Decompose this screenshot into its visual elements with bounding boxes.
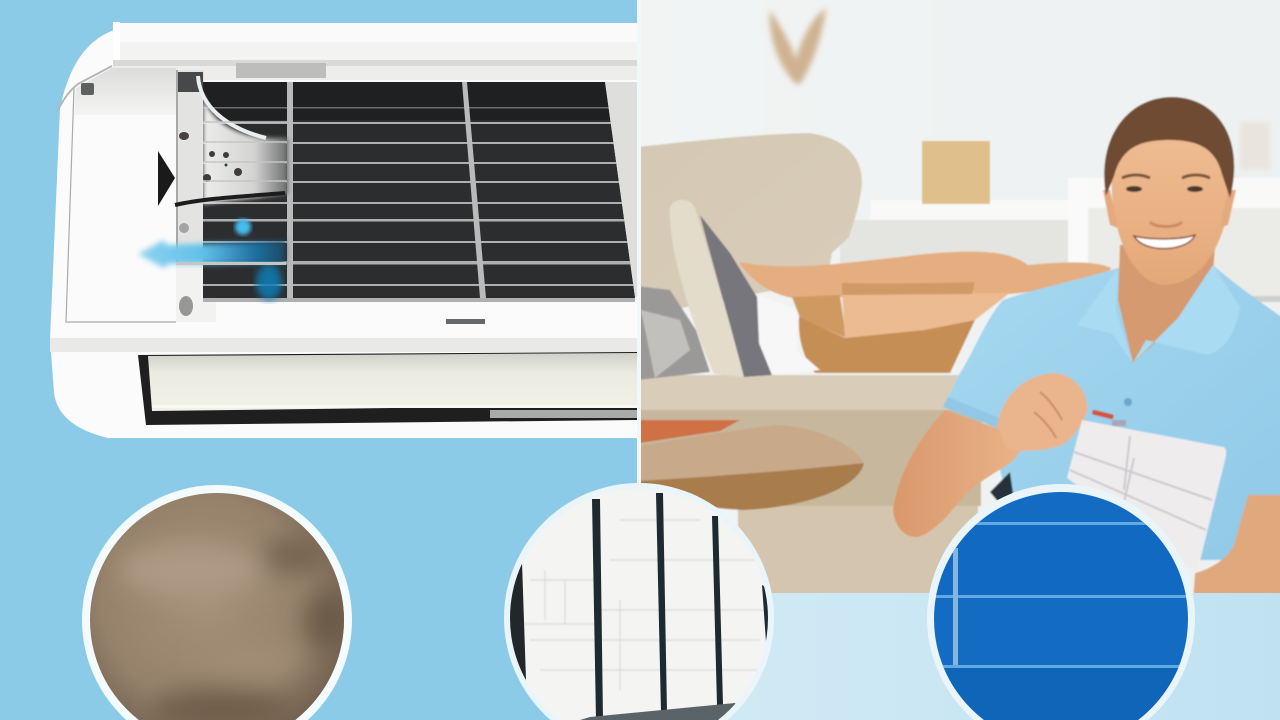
panel: living room photo <box>620 0 1280 620</box>
bracket screw bottom <box>179 296 193 316</box>
circle: dusty filter close-up <box>82 485 356 720</box>
filter bracket <box>176 70 216 322</box>
orange rug edge <box>641 419 740 444</box>
unit body <box>50 24 637 438</box>
peeled dirty filter corner <box>175 76 288 205</box>
panel: right pale blue background <box>641 593 1280 720</box>
panel: left blue background <box>0 0 637 720</box>
circle: clean blue filter close-up <box>927 484 1195 720</box>
shoe <box>670 200 820 377</box>
bracket dirt <box>179 132 189 140</box>
bracket screw top <box>179 223 189 233</box>
pampas decor <box>770 8 826 84</box>
collar <box>1077 265 1240 363</box>
vertical ribs <box>287 82 293 298</box>
hand <box>997 373 1087 451</box>
side screw <box>81 83 94 95</box>
cushion <box>641 286 710 380</box>
upper vent <box>236 63 326 78</box>
sofa base <box>737 504 978 593</box>
divider <box>637 0 641 720</box>
red tab <box>1092 409 1114 420</box>
eyes <box>1122 175 1210 192</box>
face <box>1111 138 1231 285</box>
sofa front <box>620 410 981 506</box>
wooden box <box>922 141 990 204</box>
lower outlet <box>138 352 637 425</box>
dark chair detail <box>990 472 1014 504</box>
torso <box>943 265 1280 560</box>
black arrow marker <box>158 151 175 206</box>
smile <box>1134 235 1195 249</box>
top cover <box>113 22 637 80</box>
lower front band <box>50 338 637 352</box>
forearm <box>893 410 1030 537</box>
ears <box>1103 190 1236 228</box>
shelf unit <box>840 122 1280 302</box>
sleeve cuff <box>944 398 998 428</box>
filter held by the man <box>1067 420 1226 573</box>
round wooden table <box>620 425 864 510</box>
neck <box>1118 245 1215 363</box>
man <box>893 97 1280 616</box>
panel: air conditioner unit <box>50 22 637 438</box>
side panel <box>58 66 176 322</box>
wall <box>620 0 1280 620</box>
right arm lower <box>1192 494 1280 593</box>
right frame <box>605 82 637 297</box>
sofa seat <box>620 375 965 412</box>
indicator light <box>446 319 485 324</box>
shirt button <box>1124 398 1132 406</box>
sofa back <box>641 132 862 308</box>
legs <box>739 252 1111 373</box>
nose <box>1150 222 1182 226</box>
blue airflow arrow <box>138 219 286 300</box>
circle: white filter close-up <box>504 483 774 720</box>
finger lines <box>1034 392 1062 438</box>
hair <box>1104 97 1234 198</box>
filter mesh <box>203 80 637 304</box>
